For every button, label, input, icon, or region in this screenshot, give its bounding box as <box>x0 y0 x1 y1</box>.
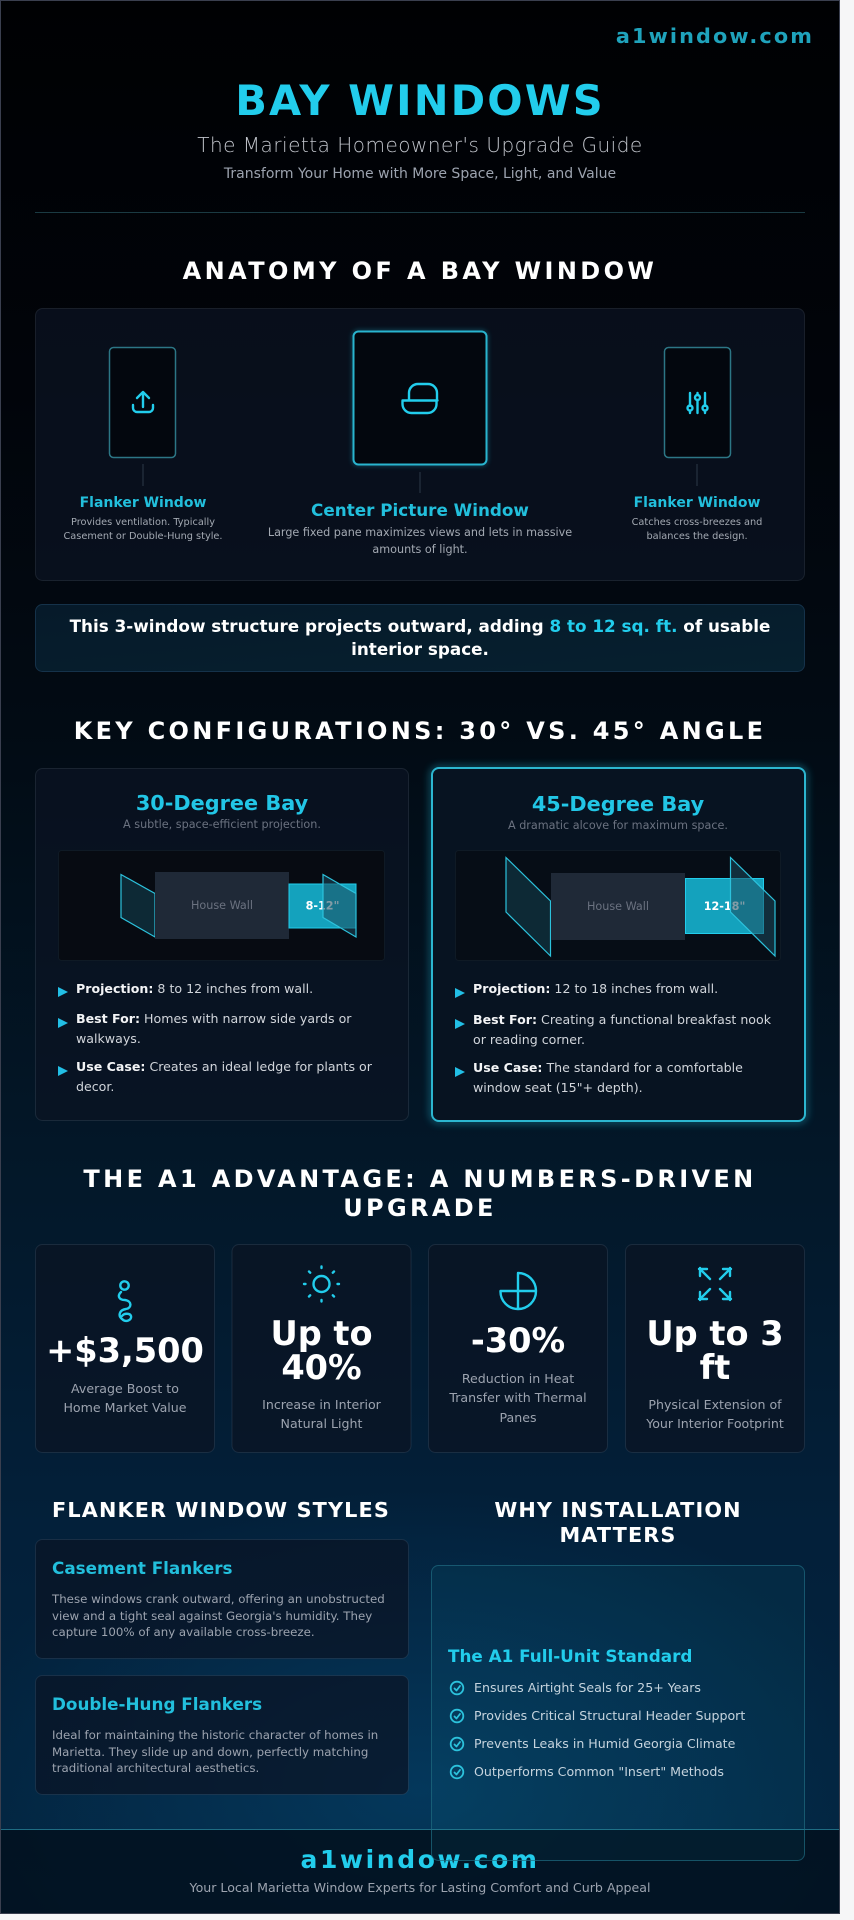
right flanker window <box>632 348 762 542</box>
check icon <box>451 1682 463 1694</box>
description: Casement or Double-Hung style. <box>63 531 223 542</box>
description <box>268 526 572 556</box>
callout: usable space: interior space. <box>351 639 489 659</box>
number: Up to <box>270 1314 373 1353</box>
description: Large fixed pane maximizes views and lets in massive <box>268 526 572 539</box>
panel: the A1 full-unit standard <box>432 1566 804 1860</box>
heading: key configurations: KEY CONFIGURATIONS: 30° VS. 45° ANGLE <box>74 717 766 745</box>
heading: why installation matters: MATTERS <box>559 1523 677 1547</box>
panel: anatomy of a bay window <box>36 308 804 580</box>
heading: why installation matters: WHY INSTALLATION <box>494 1498 742 1522</box>
house wall: House Wall <box>587 900 649 913</box>
number: +$3,500 <box>46 1331 204 1370</box>
title: BAY WINDOWS <box>235 76 605 125</box>
feature list <box>58 981 373 1094</box>
description: Catches cross-breezes and <box>632 517 762 528</box>
projection block <box>686 878 764 934</box>
projection block <box>289 884 356 928</box>
heading: the A1 advantage <box>83 1165 757 1222</box>
house wall <box>155 872 289 939</box>
description: Home Market Value <box>63 1400 187 1415</box>
diagram: 45-degree projection <box>456 850 780 960</box>
heading: 45-degree bay: 45-Degree Bay <box>532 792 705 816</box>
house wall <box>551 873 685 940</box>
description <box>632 517 762 542</box>
feature list: Best For: Homes with narrow side yards or <box>76 1011 352 1026</box>
description <box>63 1381 187 1415</box>
description: balances the design. <box>646 531 748 542</box>
number: Up to 3 <box>646 1314 784 1353</box>
callout: usable space <box>36 604 804 672</box>
icon: upload <box>133 392 153 412</box>
icon: sun <box>304 1266 339 1302</box>
icon: squiggle <box>119 1281 131 1321</box>
header divider <box>35 212 805 213</box>
icon: sliders <box>688 393 708 413</box>
number <box>646 1314 784 1387</box>
body: view and a tight seal against Georgia's humidity. They <box>52 1609 372 1623</box>
icon: expand arrows <box>699 1268 731 1300</box>
body: Ideal for maintaining the historic character of homes in <box>52 1728 378 1742</box>
feature list <box>455 981 772 1095</box>
feature list: Projection: 12 to 18 inches from wall. <box>473 981 718 996</box>
number: -30% <box>471 1321 565 1360</box>
heading: Double-Hung Flankers <box>52 1694 262 1714</box>
heading: anatomy: ANATOMY OF A BAY WINDOW <box>183 257 657 285</box>
icon: basket window <box>402 384 438 413</box>
callout: usable space: This 3-window structure projects outward, adding 8 to 12 sq. ft. of usable <box>70 616 770 636</box>
heading: why installation matters <box>494 1498 742 1547</box>
description <box>262 1397 382 1431</box>
checklist: Provides Critical Structural Header Support <box>474 1708 745 1723</box>
left angled pane <box>121 874 155 937</box>
stat card: natural light <box>232 1244 411 1452</box>
panel: double-hung flankers <box>36 1676 408 1794</box>
tagline: Transform Your Home with More Space, Light, and Value <box>223 166 616 182</box>
footer brand: a1window.com <box>300 1845 540 1874</box>
heading: The A1 Full-Unit Standard <box>448 1646 692 1666</box>
subheading: A subtle, space-efficient projection. <box>123 818 321 831</box>
description: Your Interior Footprint <box>645 1416 784 1431</box>
brand tag: a1window.com: a1window.com <box>616 24 814 48</box>
subtitle: The Marietta Homeowner's Upgrade Guide <box>197 133 643 157</box>
left angled pane <box>506 858 550 956</box>
description: Natural Light <box>281 1416 363 1431</box>
description <box>63 517 223 542</box>
feature list: Use Case: Creates an ideal ledge for plants or <box>76 1059 373 1074</box>
feature list: Use Case: The standard for a comfortable <box>473 1060 743 1075</box>
heading: the A1 advantage: THE A1 ADVANTAGE: A NUMBERS-DRIVEN <box>83 1165 757 1193</box>
description: Average Boost to <box>71 1381 179 1396</box>
check icon <box>451 1766 463 1778</box>
label: center picture window: Center Picture Window <box>311 500 529 520</box>
icon: quarter circle <box>500 1273 536 1309</box>
projection block: 8-12" <box>306 900 339 912</box>
label: flanker window: Flanker Window <box>634 495 760 511</box>
body: Marietta. They slide up and down, perfectly matching <box>52 1745 368 1759</box>
check icon <box>451 1710 463 1722</box>
body: traditional architectural aesthetics. <box>52 1761 259 1775</box>
footer tagline: Your Local Marietta Window Experts for Lasting Comfort and Curb Appeal <box>189 1880 650 1895</box>
description: Transfer with Thermal <box>448 1390 587 1405</box>
checklist: Prevents Leaks in Humid Georgia Climate <box>474 1736 736 1751</box>
feature list: decor. <box>76 1079 114 1094</box>
feature list: Best For: Creating a functional breakfast nook <box>473 1012 772 1027</box>
footer <box>1 1829 839 1913</box>
heading: flanker window styles: FLANKER WINDOW STYLES <box>52 1498 390 1522</box>
description: Provides ventilation. Typically <box>71 517 215 528</box>
body: These windows crank outward, offering an unobstructed <box>51 1592 385 1606</box>
stat card: heat transfer <box>428 1244 608 1452</box>
panel: 30-degree bay <box>36 768 408 1120</box>
feature list: window seat (15"+ depth). <box>473 1080 643 1095</box>
panel: casement flankers <box>36 1540 408 1658</box>
right angled pane <box>730 858 775 956</box>
description: Panes <box>499 1410 537 1425</box>
house wall: House Wall <box>191 899 253 912</box>
feature list: walkways. <box>76 1031 141 1046</box>
description: Reduction in Heat <box>462 1371 574 1386</box>
check icon <box>451 1738 463 1750</box>
checklist <box>451 1680 745 1779</box>
stat card: market value <box>36 1244 214 1452</box>
heading: Casement Flankers <box>52 1558 233 1578</box>
label: flanker window: Flanker Window <box>80 495 206 511</box>
number: 40% <box>281 1348 362 1387</box>
checklist: Outperforms Common "Insert" Methods <box>474 1764 724 1779</box>
projection block: 12-18" <box>704 900 745 913</box>
right angled pane <box>323 874 356 937</box>
heading: 30-degree bay: 30-Degree Bay <box>136 791 309 815</box>
subheading: A dramatic alcove for maximum space. <box>508 819 728 832</box>
body <box>51 1592 385 1639</box>
panel: 45-degree bay <box>432 768 805 1121</box>
description: Increase in Interior <box>262 1397 382 1412</box>
feature list: Projection: 8 to 12 inches from wall. <box>76 981 313 996</box>
body <box>52 1728 378 1775</box>
number <box>270 1314 373 1387</box>
stat card: footprint <box>626 1244 804 1452</box>
description: Physical Extension of <box>648 1397 782 1412</box>
number: ft <box>700 1348 730 1387</box>
left flanker window <box>63 348 223 542</box>
description <box>448 1371 587 1425</box>
checklist: Ensures Airtight Seals for 25+ Years <box>474 1680 701 1695</box>
description <box>645 1397 784 1431</box>
diagram: 30-degree projection <box>58 850 384 960</box>
heading: the A1 advantage: UPGRADE <box>343 1194 497 1222</box>
body: capture 100% of any available cross-breeze. <box>52 1625 315 1639</box>
description: amounts of light. <box>372 543 468 556</box>
center picture window <box>268 332 572 556</box>
feature list: or reading corner. <box>473 1032 585 1047</box>
